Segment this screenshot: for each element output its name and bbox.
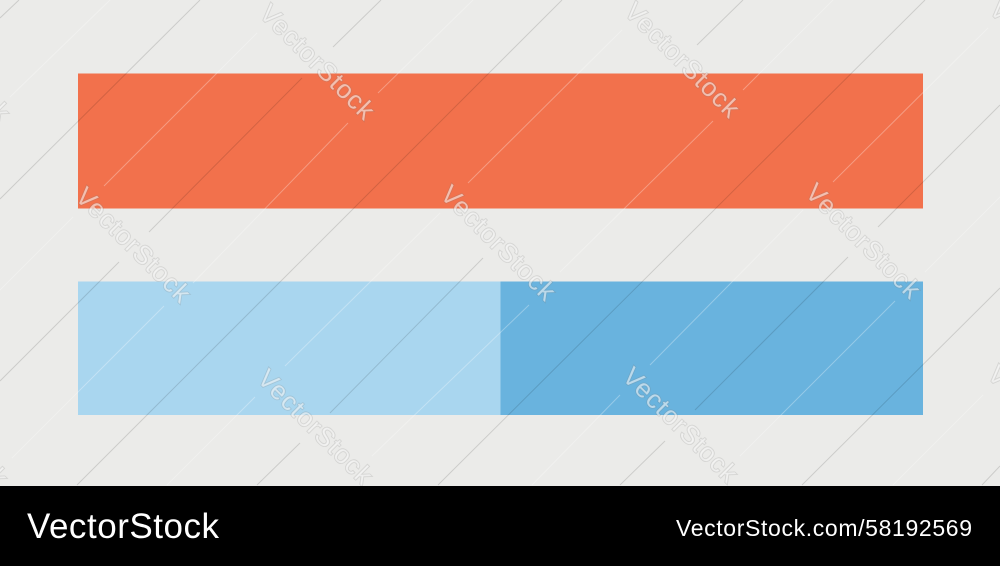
footer image id text: VectorStock.com/58192569: [676, 515, 972, 541]
watermark group: VectorStock: [252, 363, 380, 491]
watermark group: VectorStock: [70, 181, 198, 309]
footer bar: [0, 486, 1000, 566]
watermark group: VectorStock: [435, 179, 563, 307]
orange bar: [78, 74, 923, 208]
watermark group: VectorStock: [800, 177, 928, 305]
watermark group: VectorStock: [617, 361, 745, 489]
light blue segment: [78, 282, 500, 415]
dark blue segment: [500, 282, 923, 415]
footer logo text: VectorStock: [27, 507, 220, 546]
watermark group: VectorStock: [254, 0, 382, 126]
split blue bar: [78, 282, 923, 415]
